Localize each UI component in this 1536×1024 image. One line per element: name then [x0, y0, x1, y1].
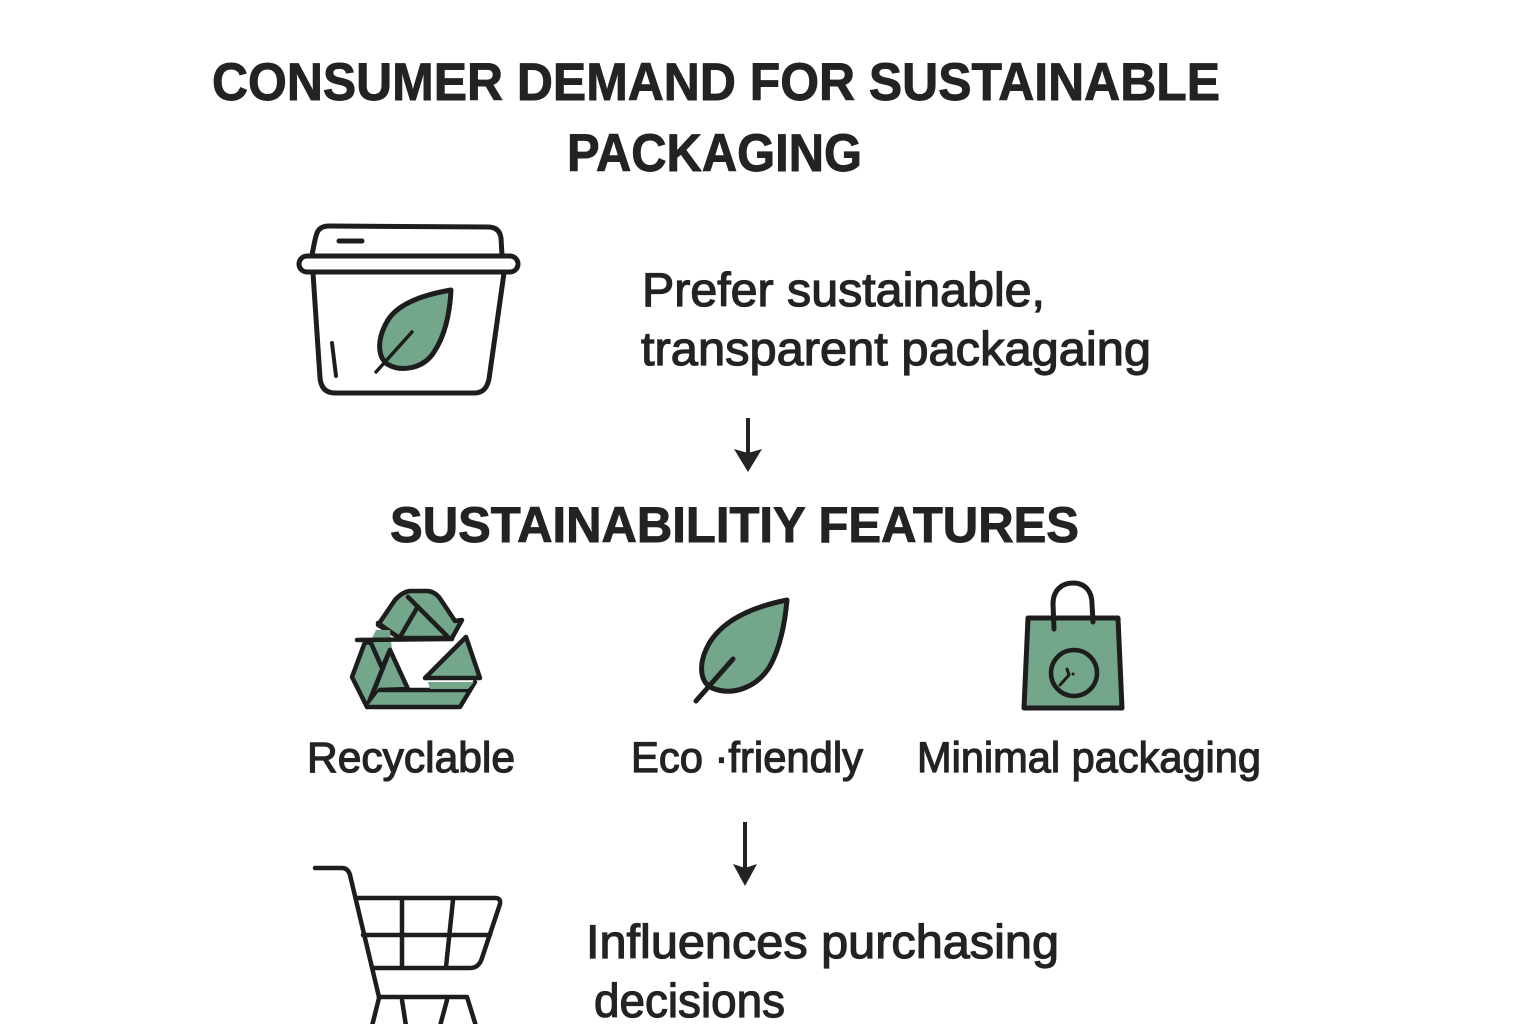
arrow: down to features [734, 418, 762, 472]
icon: leaf [696, 600, 787, 701]
label: recyclable: Recyclable [307, 734, 515, 782]
title: CONSUMER DEMAND FOR SUSTAINABLE [212, 53, 1220, 112]
label: eco-friendly: Eco ·friendly [631, 734, 863, 782]
title: PACKAGING [567, 124, 862, 183]
heading: sustainability features: SUSTAINABILITIY FEATURES [390, 497, 1079, 553]
icon: shopping bag [1024, 583, 1122, 708]
text: influences purchasing decisions: Influences purchasing [586, 915, 1059, 968]
text: prefer sustainable packaging [641, 263, 1151, 375]
icon: food container with leaf [299, 226, 518, 393]
icon: recycle symbol [352, 591, 480, 707]
text: prefer sustainable packaging: Prefer sustainable, [642, 263, 1045, 316]
text: influences purchasing decisions [586, 915, 1059, 1024]
label: minimal packaging: Minimal packaging [917, 734, 1261, 782]
icon: shopping cart [315, 868, 500, 1024]
title [212, 53, 1220, 183]
text: prefer sustainable packaging: transparent packagaing [641, 322, 1151, 375]
arrow: down to purchasing [733, 822, 757, 886]
